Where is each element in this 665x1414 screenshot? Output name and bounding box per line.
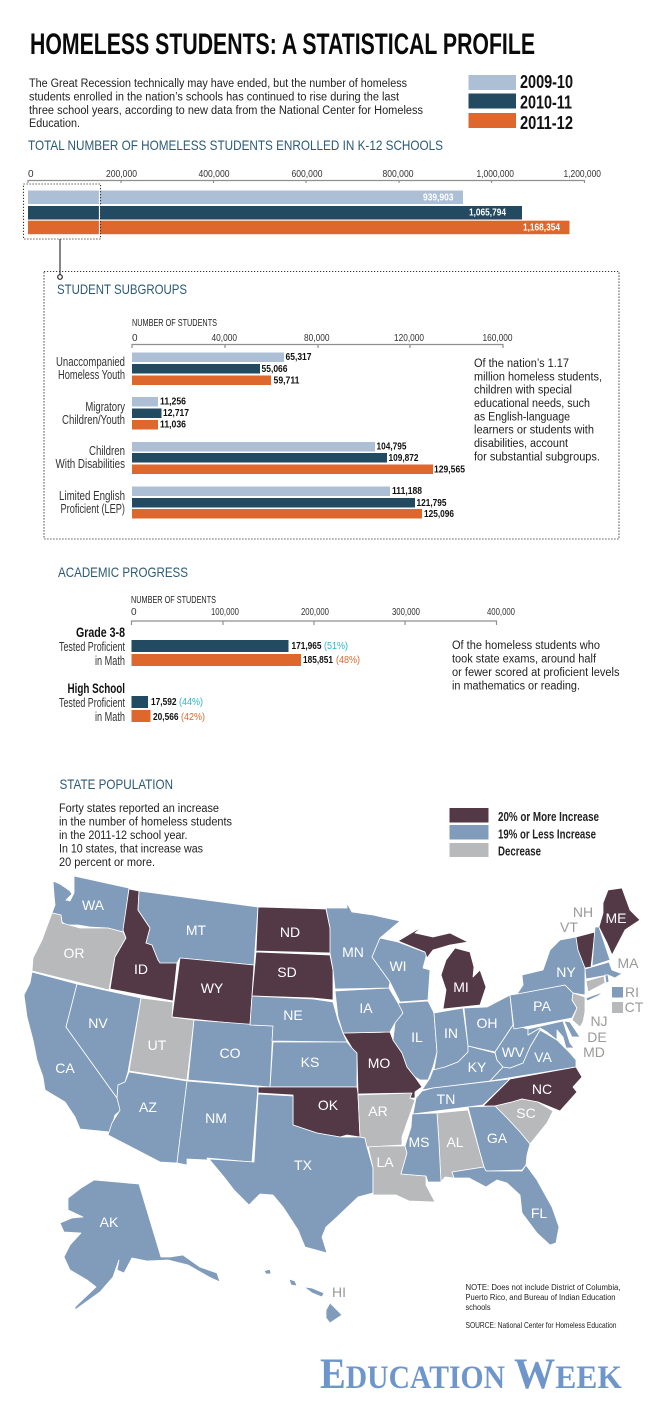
state: ID [110, 889, 177, 1001]
state: OH: OH [476, 1015, 498, 1031]
text: academic note [452, 640, 620, 692]
group: migratory children/youth: Children/Youth [62, 413, 125, 427]
footnote: schools [466, 1303, 490, 1312]
heading: student subgroups: STUDENT SUBGROUPS [57, 281, 187, 297]
text: subgroups note: million homeless students, [474, 371, 602, 383]
group: grade 3-8: in Math [95, 654, 125, 668]
group: children with disabilities: 109,872 [388, 452, 419, 464]
state: AR [358, 1093, 415, 1147]
state: TX [209, 1094, 373, 1253]
group: grade 3-8: 171,965 [292, 640, 322, 652]
map: united states [24, 876, 644, 1323]
text: subgroups note: for substantial subgroups. [474, 451, 600, 463]
legend: school years: 2009-10 [520, 72, 573, 92]
group: unaccompanied homeless youth: Homeless Youth [58, 368, 125, 382]
text: state population note: In 10 states, that increase was [59, 844, 203, 856]
state: CA [24, 972, 121, 1132]
state: PA: PA [533, 998, 551, 1014]
group: grade 3-8 [59, 624, 360, 668]
bar: 2009-10: 939,903 [423, 192, 454, 204]
group: limited english proficient: 111,188 [392, 485, 422, 497]
state: KY: KY [468, 1059, 487, 1075]
outside labels: northeast states: NH [573, 904, 593, 920]
panel: student subgroups [44, 272, 619, 539]
outside labels: northeast states: VT [560, 919, 578, 935]
text: state population note: in the 2011-12 school year. [59, 830, 188, 842]
state: SC: SC [516, 1105, 536, 1121]
legend: map: 20% or More Increase [498, 810, 599, 824]
state: IL: IL [411, 1029, 423, 1045]
state: AL: AL [446, 1134, 464, 1150]
axis: subgroups: 0 [132, 333, 138, 344]
state: OR [32, 913, 126, 990]
state: WA: WA [82, 897, 105, 913]
state: TX: TX [294, 1157, 313, 1173]
state: GA: GA [487, 1130, 508, 1146]
text: subgroups note [474, 358, 602, 463]
text: subgroups note: Of the nation’s 1.17 [474, 358, 569, 370]
text: subgroups note: children with special [474, 385, 572, 397]
group: unaccompanied homeless youth: 59,711 [274, 374, 300, 386]
legend swatch: CT [612, 999, 644, 1015]
state: WY [172, 958, 254, 1025]
footnote [466, 1283, 620, 1330]
state: MT: MT [186, 922, 207, 938]
state: CO [188, 1020, 273, 1087]
text: subgroups note: as English-language [474, 411, 570, 423]
state: MI: MI [453, 979, 469, 995]
axis: subgroups: 40,000 [212, 333, 237, 344]
state: ND: ND [280, 924, 300, 940]
outside labels: northeast states: MD [583, 1044, 605, 1060]
group: limited english proficient: 125,096 [424, 508, 454, 520]
group: migratory children/youth: Migratory [85, 400, 126, 414]
state: OK [258, 1087, 360, 1137]
state: MT [138, 891, 258, 965]
state: IL [393, 1001, 437, 1080]
bar: 2011-12: 1,168,354 [523, 222, 560, 234]
footnote: SOURCE: National Center for Homeless Education [466, 1321, 616, 1330]
legend: map [450, 808, 599, 858]
axis: academic progress: 300,000 [392, 607, 420, 618]
state: WA [52, 876, 129, 932]
group: high school: (42%) [181, 711, 205, 723]
state: IA: IA [359, 1000, 373, 1016]
outside labels: northeast states: MA [618, 955, 639, 971]
panel: academic progress [58, 564, 620, 724]
group: grade 3-8: Tested Proficient [59, 640, 125, 654]
group: children with disabilities [56, 440, 465, 476]
axis: academic progress: NUMBER OF STUDENTS [131, 595, 216, 606]
state: LA [368, 1146, 435, 1202]
group: grade 3-8: (48%) [336, 654, 360, 666]
state: TN [413, 1079, 510, 1114]
heading: total number: TOTAL NUMBER OF HOMELESS STUDENTS ENROLLED IN K-12 SCHOOLS [28, 137, 443, 153]
state: HI [264, 1269, 346, 1323]
state: IA [335, 988, 403, 1033]
text: academic note: Of the homeless students who [452, 640, 600, 652]
state: GA [468, 1106, 530, 1171]
group: children with disabilities: 104,795 [376, 440, 407, 452]
legend: school years: 2010-11 [520, 92, 572, 112]
axis: academic progress: 100,000 [211, 607, 239, 618]
text: subgroups note: disabilities, account [474, 438, 569, 450]
group: children with disabilities: Children [89, 444, 125, 458]
axis: academic progress: 0 [131, 607, 137, 618]
state: NE [250, 996, 347, 1042]
dotted zoom box with connector [24, 184, 100, 279]
axis: 800,000 [382, 169, 414, 180]
logo: education week: WEEK [514, 1351, 622, 1398]
state: AR: AR [368, 1103, 388, 1119]
chart: total homeless students [28, 169, 601, 234]
group: limited english proficient: 121,795 [416, 497, 447, 509]
state: NY [517, 937, 603, 1001]
group: migratory children/youth: 11,036 [160, 418, 186, 430]
outside labels: northeast states: NJ [590, 1013, 608, 1029]
group: high school: 17,592 [151, 696, 177, 708]
legend: map: 19% or Less Increase [498, 828, 596, 842]
text: academic note: in mathematics or reading. [452, 680, 580, 692]
state: PA [510, 985, 577, 1029]
text: academic note: took state exams, around half [452, 654, 597, 666]
state: WV: WV [502, 1044, 525, 1060]
state: FL [452, 1165, 559, 1245]
group: unaccompanied homeless youth: 65,317 [286, 351, 312, 363]
state: MD [528, 1021, 574, 1048]
axis: subgroups: NUMBER OF STUDENTS [132, 318, 217, 329]
state: SD: SD [277, 964, 297, 980]
state: KY [422, 1046, 503, 1090]
legend: school years [468, 72, 573, 133]
group: limited english proficient: Proficient (LEP) [60, 502, 125, 516]
state: OK: OK [318, 1097, 339, 1113]
state: KS [270, 1042, 357, 1087]
legend swatch: RI: RI [625, 984, 639, 1000]
legend swatch: CT: CT [625, 999, 644, 1015]
state: NE: NE [283, 1007, 303, 1023]
axis: subgroups: 80,000 [304, 333, 330, 344]
state: ME [599, 888, 640, 955]
group: unaccompanied homeless youth: Unaccompanied [56, 355, 125, 369]
axis: subgroups: 160,000 [482, 333, 513, 344]
state: FL: FL [531, 1205, 547, 1221]
group: migratory children/youth: 12,717 [163, 407, 189, 419]
state: NV: NV [88, 1015, 108, 1031]
group: children with disabilities: With Disabilities [56, 457, 125, 471]
state: WV [495, 1025, 540, 1068]
group: high school: 20,566 [153, 711, 179, 723]
group: unaccompanied homeless youth: 55,066 [262, 363, 288, 375]
legend: school years: 2011-12 [520, 113, 573, 133]
logo: education week: EDUCATION [320, 1351, 505, 1398]
state: VA: VA [534, 1049, 552, 1065]
state: WY: WY [201, 980, 224, 996]
state: VT [576, 932, 595, 968]
axis: 200,000 [106, 169, 137, 180]
state: MO: MO [368, 1055, 390, 1071]
group: high school: (44%) [179, 696, 203, 708]
state: NJ [572, 993, 585, 1027]
legend swatch: RI [612, 984, 639, 1000]
group: high school: High School [68, 680, 125, 696]
state: MI [398, 927, 486, 1009]
state: MA [585, 962, 623, 979]
intro text: students enrolled in the nation’s schools has continued to rise during the last [29, 92, 400, 104]
axis: 400,000 [198, 169, 230, 180]
state: CT [586, 976, 605, 992]
group: high school: in Math [95, 710, 125, 724]
state: ID: ID [134, 961, 148, 977]
state: UT [129, 998, 194, 1080]
text: state population note: 20 percent or more. [59, 857, 155, 869]
state: IN: IN [444, 1025, 458, 1041]
state: NH [592, 927, 610, 966]
group: high school [59, 680, 205, 724]
bar: 2010-11 [28, 206, 522, 220]
state: NY: NY [556, 964, 576, 980]
bar: 2009-10 [28, 190, 463, 204]
state: TN: TN [437, 1091, 455, 1107]
group: migratory children/youth [62, 396, 189, 430]
state: NV [66, 984, 141, 1098]
state: MO [343, 1032, 422, 1098]
bar: 2011-12 [28, 221, 570, 234]
state: AK: AK [100, 1214, 119, 1230]
intro text: Education. [29, 118, 80, 130]
intro text [29, 78, 423, 130]
axis: 1,000,000 [476, 169, 514, 180]
state: AK [60, 1180, 220, 1310]
axis: 0 [28, 169, 34, 180]
axis: 1,200,000 [564, 169, 601, 180]
axis: subgroups [132, 318, 513, 348]
state: NM [177, 1081, 258, 1165]
axis: 600,000 [292, 169, 323, 180]
axis [28, 169, 601, 183]
heading: academic progress: ACADEMIC PROGRESS [58, 564, 188, 580]
state: IN [434, 1008, 468, 1070]
axis: academic progress [131, 595, 515, 625]
state: LA: LA [376, 1154, 394, 1170]
intro text: The Great Recession technically may have ended, but the number of homeless [29, 78, 407, 90]
state: MN: MN [342, 944, 364, 960]
state: KS: KS [301, 1054, 319, 1070]
state: NM: NM [205, 1110, 227, 1126]
footnote: NOTE: Does not include District of Columbia, [466, 1283, 620, 1292]
axis: academic progress: 400,000 [487, 607, 515, 618]
state: ND [256, 907, 332, 953]
state: HI: HI [332, 1284, 346, 1300]
text: subgroups note: learners or students with [474, 425, 594, 437]
group: limited english proficient [59, 485, 454, 520]
state: AL [437, 1110, 484, 1182]
state: ME: ME [606, 910, 626, 926]
state: AZ [108, 1072, 187, 1163]
group: grade 3-8: (51%) [324, 640, 348, 652]
state: NC [483, 1067, 582, 1111]
logo: education week [320, 1351, 622, 1398]
group: high school: Tested Proficient [59, 696, 125, 710]
group: unaccompanied homeless youth [56, 351, 312, 386]
group: migratory children/youth: 11,256 [160, 396, 186, 408]
state: DE [564, 1021, 580, 1037]
state: WI [372, 938, 430, 1002]
state: NC: NC [532, 1081, 552, 1097]
group: limited english proficient: Limited English [59, 489, 125, 503]
outside labels: northeast states: DE [587, 1029, 607, 1045]
state: MN [326, 903, 400, 989]
state: RI [605, 975, 609, 983]
state: SD [252, 952, 333, 1000]
state: SC [495, 1099, 553, 1144]
state: AZ: AZ [139, 1099, 157, 1115]
state: CA: CA [55, 1060, 75, 1076]
axis: academic progress: 200,000 [301, 607, 329, 618]
state: MS: MS [408, 1134, 430, 1150]
state: OR: OR [64, 945, 84, 961]
legend: map: Decrease [498, 844, 541, 858]
state: CO: CO [220, 1045, 241, 1061]
text: state population note: in the number of homeless students [59, 816, 232, 828]
group: grade 3-8: 185,851 [303, 654, 333, 666]
group: children with disabilities: 129,565 [434, 464, 465, 476]
footnote: Puerto Rico, and Bureau of Indian Education [466, 1293, 616, 1302]
group: grade 3-8: Grade 3-8 [76, 624, 125, 640]
state: OH [464, 995, 513, 1052]
heading: state population: STATE POPULATION [60, 776, 173, 792]
state: VA [490, 1030, 576, 1081]
text: academic note: or fewer scored at proficient levels [452, 667, 620, 679]
bar: 2010-11: 1,065,794 [469, 207, 506, 219]
text: subgroups note: educational needs, such [474, 398, 590, 410]
state: WI: WI [389, 958, 407, 974]
axis: subgroups: 120,000 [394, 333, 424, 344]
text: state population note [59, 803, 232, 869]
state: UT: UT [148, 1037, 167, 1053]
text: state population note: Forty states reported an increase [59, 803, 219, 815]
intro text: three school years, according to new data from the National Center for Homeless [29, 105, 423, 117]
outside labels: northeast states [560, 904, 639, 1060]
state: MS [401, 1113, 441, 1182]
